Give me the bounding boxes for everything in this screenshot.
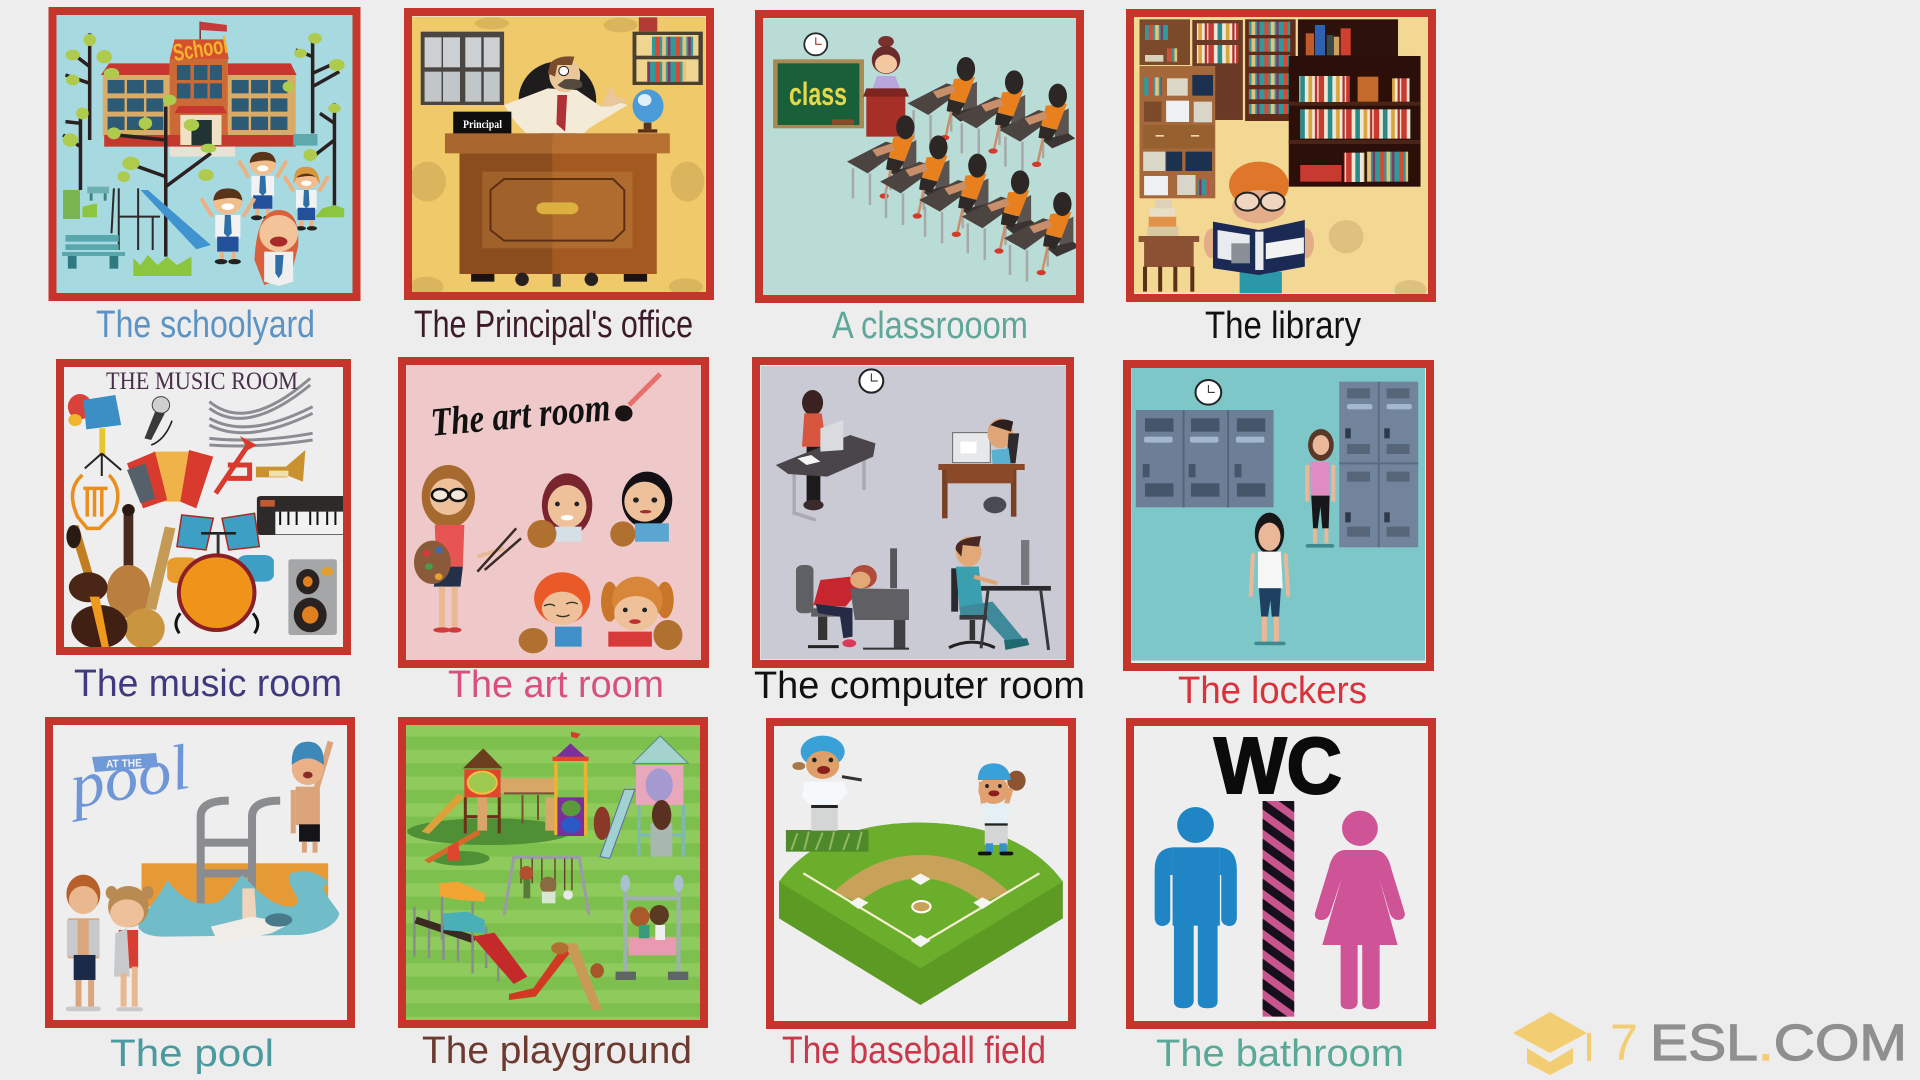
- illustration: students by lockers: [1131, 367, 1425, 661]
- icon: pink tower with slide: [594, 736, 688, 858]
- icon: man figure: [1155, 807, 1237, 1008]
- panel: the playground: [402, 721, 704, 1072]
- icon: window: [421, 32, 504, 105]
- frame: [408, 12, 710, 296]
- panel: the art room: [402, 361, 705, 706]
- icon: blackboard: [773, 59, 864, 128]
- icon: child 1: [527, 473, 592, 548]
- icon: boy reading: [1204, 162, 1314, 293]
- icon: swimmer: [211, 888, 292, 943]
- panel: the lockers: [1127, 364, 1430, 712]
- icon: globe: [633, 89, 664, 133]
- icon: speaker: [288, 559, 337, 635]
- sign: class: class: [789, 76, 847, 112]
- icon: right lockers: [1339, 382, 1418, 547]
- icon: keyboard: [257, 496, 348, 535]
- icon: teacher at podium: [863, 36, 909, 137]
- caption: A classrooom: [832, 305, 1028, 347]
- sign: principal: Principal: [463, 117, 503, 131]
- icon: child 4: [601, 577, 682, 650]
- icon: student typing at desk: [949, 536, 1051, 650]
- frame: [770, 722, 1072, 1025]
- caption: The bathroom: [1156, 1033, 1404, 1075]
- frame: [49, 721, 351, 1024]
- caption: The playground: [422, 1030, 692, 1072]
- caption: The library: [1205, 305, 1361, 347]
- icon: play tower: [407, 732, 589, 866]
- icon: desk: [445, 133, 670, 287]
- icon: batter: [792, 736, 862, 831]
- icon: grass: [82, 203, 344, 276]
- icon: lyre: [73, 475, 118, 528]
- icon: music staves: [209, 378, 313, 446]
- icon: boy with towel: [66, 875, 101, 1011]
- illustration: children at the pool: [52, 725, 348, 1021]
- panel: the computer room: [754, 361, 1085, 707]
- sign: at the: AT THE: [106, 757, 142, 771]
- caption: The computer room: [754, 665, 1085, 707]
- sign: the art room: The art room: [429, 384, 612, 445]
- illustration: art teacher and children: [406, 365, 702, 661]
- icon: benches and bin: [62, 187, 125, 269]
- frame: [60, 363, 347, 651]
- icon: swinging bench: [616, 875, 688, 980]
- icon: drum kit: [167, 513, 274, 633]
- sign: pool script: pool: [60, 731, 195, 822]
- icon: child 3: [519, 572, 590, 653]
- icon: woman at standing desk: [776, 390, 875, 520]
- icon: swing set: [504, 857, 589, 915]
- frame: [759, 14, 1080, 299]
- icon: left lockers: [1136, 410, 1274, 507]
- icon: red trumpet: [216, 436, 257, 493]
- icon: girl in foreground: [1251, 513, 1288, 645]
- icon: back shelves: [1140, 19, 1398, 121]
- icon: wooden cabinet: [1140, 66, 1215, 198]
- panel: the baseball field: [770, 722, 1072, 1072]
- icon: microphone: [144, 397, 172, 445]
- caption: The music room: [74, 663, 342, 705]
- icon: playground slide and climbing frame: [111, 188, 211, 250]
- caption: The schoolyard: [96, 304, 315, 346]
- icon: teacher with palette: [414, 465, 521, 633]
- panel: the schoolyard: [52, 11, 356, 346]
- icon: student sleeping at desk: [796, 548, 909, 650]
- icon: clock: [1196, 380, 1221, 405]
- icon: climbing frame with red slide: [414, 882, 527, 984]
- icon: girl with towel: [106, 886, 154, 1011]
- caption: The art room: [448, 664, 664, 706]
- wordmark: letters: ESL.COM: [1650, 1014, 1907, 1071]
- icon: child 2: [610, 472, 672, 547]
- icon: pool ladder: [201, 801, 280, 903]
- icon: striped divider: [1263, 801, 1294, 1017]
- icon: pool wall: [142, 863, 328, 907]
- panel: a classroom: [759, 14, 1080, 347]
- frame: [1127, 364, 1430, 667]
- illustration: people at computers: [761, 366, 1066, 659]
- illustration: baseball diamond and players: [773, 726, 1069, 1021]
- icon: side table with books: [1139, 200, 1199, 292]
- icon: principal figure: [504, 56, 629, 138]
- icon: boy waving: [292, 742, 331, 853]
- icon: children: [201, 152, 328, 286]
- icon: man at wooden desk: [938, 418, 1025, 518]
- illustration: boy reading among bookshelves: [1133, 17, 1428, 300]
- icon: trees: [63, 33, 345, 257]
- frame: [402, 721, 704, 1024]
- panel: the music room: [60, 363, 348, 705]
- icon: baseball field: [779, 823, 1063, 1005]
- panel: the principal's office: [408, 12, 710, 346]
- icon: guitars and violin: [66, 504, 175, 648]
- wordmark: digit: 7: [1610, 1014, 1638, 1071]
- panel: the library: [1130, 13, 1432, 347]
- icon: brass trumpet: [256, 450, 305, 482]
- frame: [52, 11, 356, 297]
- icon: clock: [804, 33, 827, 55]
- caption: The lockers: [1178, 670, 1367, 712]
- sign: WC: WC: [1214, 721, 1342, 810]
- caption: The baseball field: [782, 1030, 1046, 1072]
- icon: water waves: [138, 871, 339, 937]
- logo: 7ESL.COM: [1513, 1012, 1907, 1075]
- icon: woman figure: [1315, 811, 1405, 1009]
- icon: name plate: [453, 112, 511, 134]
- icon: fielder: [978, 763, 1026, 855]
- icon: students at desks: [847, 57, 1080, 282]
- icon: graduation cap: [1513, 1012, 1591, 1075]
- panel: the pool: [49, 721, 351, 1075]
- frame: [1130, 722, 1432, 1025]
- icon: at the pool banner: [92, 753, 158, 772]
- icon: second slide: [509, 942, 604, 1010]
- icon: school building: [101, 22, 317, 157]
- icon: standing girl near lockers: [1306, 429, 1334, 548]
- illustration: restroom sign: [1133, 726, 1429, 1021]
- icon: grass patch: [786, 830, 869, 852]
- frame: [756, 361, 1070, 664]
- icon: accordion: [127, 450, 213, 508]
- illustration: playground equipment: [405, 725, 701, 1021]
- caption: The Principal's office: [414, 304, 693, 346]
- frame: [1130, 13, 1432, 298]
- sign: the music room: THE MUSIC ROOM: [106, 368, 298, 395]
- illustration: school building, trees and children: [56, 15, 353, 293]
- icon: paint brush: [615, 374, 660, 421]
- panel: the bathroom: [1130, 721, 1432, 1075]
- frame: [402, 361, 705, 664]
- illustration: musical instruments: [63, 366, 348, 648]
- illustration: principal at desk: [409, 17, 706, 297]
- icon: bookshelf: [633, 17, 703, 85]
- icon: front bookcase: [1289, 56, 1421, 187]
- sign: school: School: [171, 32, 230, 67]
- illustration: teacher and students: [763, 18, 1080, 295]
- icon: music stand: [68, 394, 121, 476]
- icon: clock: [859, 369, 883, 393]
- caption: The pool: [110, 1033, 274, 1075]
